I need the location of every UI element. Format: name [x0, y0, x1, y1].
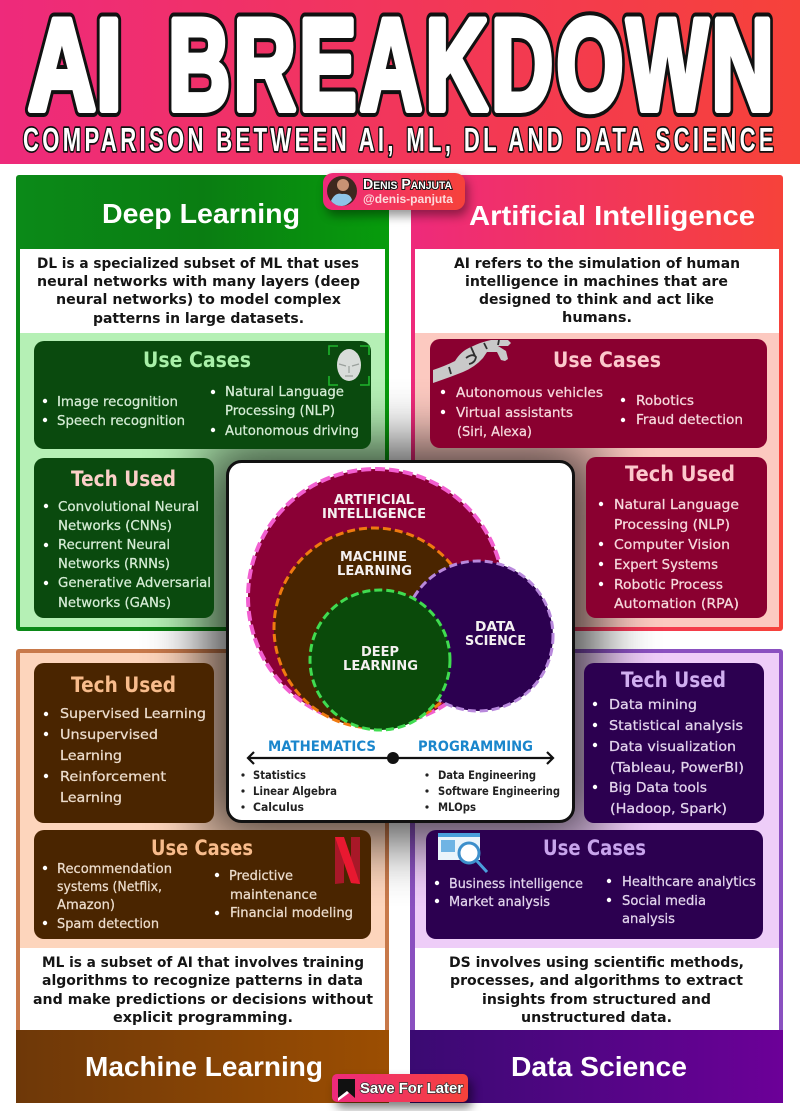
panel: data science tech used: [584, 663, 764, 823]
list: tech used: [593, 697, 744, 817]
list: tech used: Supervised Learning: [60, 706, 206, 722]
list: use cases: Market analysis: [449, 894, 550, 910]
heading: programming: PROGRAMMING: [418, 739, 533, 755]
icon: bookmark: [338, 1079, 355, 1101]
text: data science definition: [449, 955, 744, 1026]
list: use cases: Social media: [622, 893, 706, 909]
heading: tech used: Tech Used: [625, 462, 735, 486]
panel: central venn diagram card: [228, 462, 574, 822]
heading: tech used: Tech Used: [71, 467, 176, 491]
text: data science definition: processes, and algorithms to extract: [450, 973, 743, 989]
text: machine learning definition: and make predictions or decisions without: [33, 992, 373, 1008]
arrow: mathematics to programming axis: [248, 752, 553, 764]
list: use cases: Virtual assistants: [456, 405, 573, 421]
list: tech used: [599, 497, 739, 612]
badge: author: Denis Panjuta: [363, 176, 452, 193]
list: mathematics skills: Calculus: [253, 800, 304, 814]
icon: author avatar: [327, 176, 357, 206]
list: tech used: Networks (RNNs): [58, 556, 170, 572]
heading: use cases: Use Cases: [553, 348, 661, 372]
text: deep learning definition: neural networks with many layers (deep: [37, 274, 360, 290]
list: use cases: Autonomous vehicles: [456, 385, 603, 401]
text: data science definition: insights from structured and: [482, 992, 711, 1008]
list: tech used: Learning: [60, 748, 122, 764]
panel: machine learning use cases: [34, 830, 371, 939]
heading: use cases: Use Cases: [543, 836, 646, 860]
icon: face scan: [329, 346, 369, 385]
list: use cases: systems (Netflix,: [57, 879, 162, 895]
list: programming skills: Software Engineering: [438, 784, 560, 798]
list: tech used: [44, 499, 211, 611]
icon: robot hand: [433, 340, 511, 383]
panel: machine learning tech used: [34, 663, 214, 823]
list: use cases: maintenance: [230, 887, 317, 903]
text: deep learning definition: patterns in large datasets.: [93, 311, 304, 327]
list: programming skills: Data Engineering: [438, 768, 536, 782]
heading: artificial intelligence: Artificial Intelligence: [469, 200, 755, 231]
list: tech used: Recurrent Neural: [58, 537, 170, 553]
list: use cases: Recommendation: [57, 861, 172, 877]
list: tech used: Expert Systems: [614, 557, 718, 573]
heading: data science: Data Science: [511, 1051, 687, 1082]
text: machine learning definition: ML is a subset of AI that involves training: [42, 955, 364, 971]
list: use cases: Amazon): [57, 897, 115, 913]
list: use cases: Robotics: [636, 393, 694, 409]
list: use cases: Autonomous driving: [225, 423, 359, 439]
text: artificial intelligence definition: intelligence in machines that are: [465, 274, 728, 290]
list: tech used: Data visualization: [609, 739, 736, 755]
text: artificial intelligence definition: AI refers to the simulation of human: [454, 256, 740, 272]
list: tech used: Natural Language: [614, 497, 739, 513]
heading: use cases: Use Cases: [151, 836, 253, 860]
chart: venn diagram: ARTIFICIAL: [334, 492, 414, 508]
list: use cases: Financial modeling: [230, 905, 353, 921]
panel: artificial intelligence tech used: [586, 457, 767, 618]
header banner: [0, 0, 800, 164]
list: use cases: analysis: [622, 911, 675, 927]
list: tech used: Big Data tools: [609, 780, 707, 796]
text: machine learning definition: algorithms to recognize patterns in data: [42, 973, 363, 989]
list: tech used: Networks (CNNs): [58, 518, 172, 534]
chart: venn diagram: LEARNING: [337, 563, 412, 579]
chart: venn diagram: MACHINE: [340, 549, 407, 565]
list: tech used: Learning: [60, 790, 122, 806]
list: tech used: Robotic Process: [614, 577, 723, 593]
list: tech used: Data mining: [609, 697, 697, 713]
list: use cases: Processing (NLP): [225, 403, 335, 419]
badge: author: [323, 173, 468, 216]
panel: data science use cases: [426, 830, 763, 939]
chart: venn diagram: DEEP: [361, 644, 399, 660]
panel: machine learning: [16, 649, 389, 1103]
text: artificial intelligence definition: designed to think and act like: [479, 292, 714, 308]
badge: save for later: Save For Later: [360, 1081, 463, 1097]
chart: venn diagram: [248, 469, 553, 730]
list: programming skills: MLOps: [438, 800, 476, 814]
list: use cases: (Siri, Alexa): [457, 424, 532, 440]
panel: artificial intelligence: [411, 175, 783, 631]
list: use cases: Healthcare analytics: [622, 874, 756, 890]
list: tech used: (Hadoop, Spark): [610, 801, 727, 817]
badge: author: @denis-panjuta: [363, 194, 454, 206]
chart: venn diagram: LEARNING: [343, 658, 418, 674]
list: use cases: [43, 861, 353, 932]
icon: analytics magnifier: [438, 833, 487, 872]
list: use cases: Spam detection: [57, 916, 159, 932]
panel: data science: [410, 649, 783, 1103]
list: tech used: Generative Adversarial: [58, 575, 211, 591]
heading: tech used: Tech Used: [71, 673, 176, 697]
list: use cases: [43, 384, 359, 439]
list: use cases: [435, 874, 756, 927]
chart: venn diagram: INTELLIGENCE: [322, 506, 426, 522]
text: machine learning definition: [33, 955, 373, 1026]
text: data science definition: DS involves using scientific methods,: [449, 955, 744, 971]
list: tech used: Computer Vision: [614, 537, 730, 553]
list: mathematics skills: [241, 768, 337, 814]
heading: tech used: Tech Used: [621, 668, 726, 692]
text: deep learning definition: neural networks) to model complex: [56, 292, 342, 308]
list: use cases: Image recognition: [57, 394, 178, 410]
list: tech used: (Tableau, PowerBI): [610, 760, 744, 776]
list: mathematics skills: Linear Algebra: [253, 784, 337, 798]
panel: deep learning use cases: [34, 341, 371, 449]
text: machine learning definition: explicit programming.: [113, 1010, 293, 1026]
list: use cases: Predictive: [229, 868, 293, 884]
panel: artificial intelligence use cases: [430, 339, 767, 448]
text: artificial intelligence definition: [454, 256, 740, 326]
list: use cases: Fraud detection: [636, 412, 743, 428]
text: deep learning definition: DL is a specialized subset of ML that uses: [37, 256, 359, 272]
list: tech used: Networks (GANs): [58, 595, 171, 611]
heading: machine learning: Machine Learning: [85, 1051, 323, 1082]
list: programming skills: [425, 768, 560, 814]
list: tech used: Automation (RPA): [614, 596, 739, 612]
list: use cases: Natural Language: [225, 384, 344, 400]
list: use cases: Business intelligence: [449, 876, 583, 892]
list: use cases: [441, 385, 743, 440]
text: data science definition: unstructured data.: [521, 1010, 672, 1026]
text: deep learning definition: [37, 256, 360, 327]
badge: save for later: [332, 1074, 472, 1108]
list: tech used: Processing (NLP): [614, 517, 730, 533]
list: use cases: Speech recognition: [57, 413, 185, 429]
list: tech used: [44, 706, 206, 806]
chart: venn diagram: DATA: [475, 619, 516, 635]
list: tech used: Reinforcement: [60, 769, 166, 785]
center card shadow: [205, 445, 597, 840]
heading: deep learning: Deep Learning: [102, 198, 300, 229]
list: mathematics skills: Statistics: [253, 768, 306, 782]
list: tech used: Convolutional Neural: [58, 499, 199, 515]
icon: netflix logo: [335, 837, 360, 884]
heading: mathematics: MATHEMATICS: [268, 739, 376, 755]
list: tech used: Statistical analysis: [609, 718, 743, 734]
text: artificial intelligence definition: humans.: [562, 310, 632, 326]
list: tech used: Unsupervised: [60, 727, 158, 743]
chart: venn diagram: SCIENCE: [465, 633, 526, 649]
panel: deep learning: [16, 175, 389, 631]
panel: deep learning tech used: [34, 458, 214, 618]
heading: use cases: Use Cases: [143, 348, 251, 372]
